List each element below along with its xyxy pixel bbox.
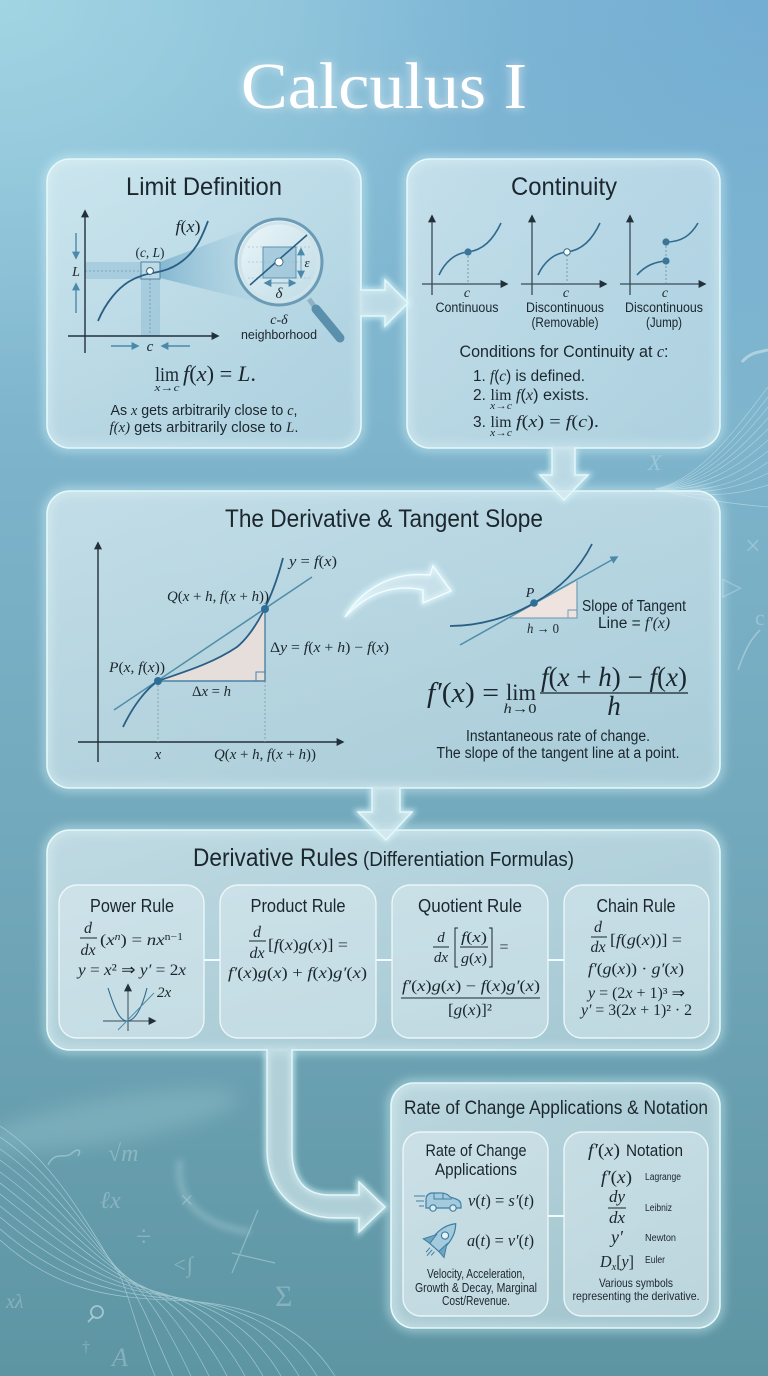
limit explanation (110, 402, 298, 436)
background: × (745, 531, 761, 562)
continuity conditions: x→c (489, 401, 513, 412)
arrow: limit to continuity (361, 280, 408, 326)
continuity conditions: x→c (489, 428, 513, 439)
panel: limit definition (47, 159, 361, 448)
card: notation: D (600, 1252, 612, 1271)
card: product rule: f′(x)g(x) + f(x)g′(x) (228, 965, 367, 982)
card: rate of change applications: Rate of Change (426, 1141, 526, 1160)
panel: derivative rules (47, 830, 720, 1050)
tangent graph: Slope of Tangent (582, 598, 687, 615)
graph: continuous: c (464, 286, 471, 301)
continuity conditions: f(x) exists. (516, 387, 589, 404)
card: product rule: [f(x)g(x)] = (268, 937, 348, 954)
continuity conditions: 3. (473, 414, 486, 431)
icon: magnifying glass: ε (304, 255, 310, 270)
card: notation: Lagrange (645, 1172, 681, 1183)
graph: continuous: Continuous (436, 300, 499, 315)
card: power rule: (x (100, 932, 113, 949)
continuity conditions: 2. (473, 387, 486, 404)
background: † (82, 1339, 90, 1356)
icon: car (414, 1193, 461, 1211)
derivative formula: h→0 (504, 702, 536, 717)
limit formula: lim (155, 364, 179, 386)
derivative explanation: Instantaneous rate of change. (466, 728, 650, 745)
limit graph: L (71, 265, 80, 280)
card: chain rule: Chain Rule (596, 895, 676, 916)
card: rate of change applications: Applications (435, 1160, 517, 1179)
card: notation: Euler (645, 1255, 666, 1266)
card: quotient rule: f(x) (461, 930, 487, 946)
card: notation: Various symbols (599, 1276, 673, 1290)
card: product rule (220, 885, 376, 1038)
card: notation: [ (616, 1252, 622, 1271)
limit formula: x→c (153, 382, 180, 394)
continuity conditions: f(x) = f(c). (516, 412, 599, 431)
card: rate of change applications: Growth & Decay, Marginal (415, 1281, 537, 1295)
continuity conditions: lim (490, 387, 512, 404)
card: power rule: y = x² ⇒ y′ = 2x (76, 962, 186, 979)
tangent graph (450, 544, 687, 645)
secant graph (78, 543, 389, 763)
icon: magnifying glass (236, 219, 340, 342)
background: ℓx (100, 1188, 121, 1214)
derivative formula: lim (506, 680, 536, 705)
card: power rule: nx (147, 932, 162, 949)
background: Σ (275, 1280, 292, 1313)
card: notation (564, 1132, 708, 1316)
card: chain rule: [f(g(x))] = (610, 932, 682, 949)
derivative formula: f(x + h) − f(x) (541, 662, 687, 692)
card: rate of change applications (403, 1132, 548, 1316)
card: product rule: Product Rule (250, 895, 346, 916)
card: notation: Newton (645, 1233, 676, 1244)
card: notation: dx (609, 1208, 625, 1227)
background: xλ (5, 1291, 24, 1313)
limit formula: f(x) = L. (183, 361, 256, 386)
background: A (110, 1343, 128, 1372)
derivative formula: h (607, 691, 621, 721)
arrow: derivative to rules (358, 788, 412, 840)
background: <∫ (172, 1252, 195, 1278)
tangent graph: P (525, 586, 535, 601)
tangent graph: Line = f′(x) (598, 615, 670, 632)
graph: jump discontinuity: c (662, 286, 669, 301)
arrow: continuity to derivative (540, 448, 588, 500)
graph: jump discontinuity (620, 216, 705, 330)
heading: (Differentiation Formulas) (363, 849, 574, 871)
card: quotient rule: d (437, 930, 445, 946)
background: c (755, 605, 765, 630)
card: chain rule: d (594, 919, 603, 936)
card: quotient rule: dx (434, 950, 448, 966)
card: notation: representing the derivative. (572, 1289, 700, 1303)
card: notation: f′(x) (588, 1140, 620, 1160)
continuity conditions: Conditions for Continuity at c: (460, 342, 668, 361)
limit graph: c (147, 339, 154, 355)
derivative formula (427, 662, 688, 721)
card: power rule: Power Rule (90, 895, 174, 916)
heading (193, 844, 574, 872)
card: notation: y′ (609, 1227, 624, 1247)
card: notation: dy (609, 1187, 625, 1206)
card: quotient rule: Quotient Rule (418, 895, 522, 916)
title: Calculus I (241, 50, 527, 123)
card: notation: y] (622, 1252, 634, 1271)
graph: removable discontinuity: Discontinuous (526, 300, 604, 315)
card: power rule: d (84, 920, 93, 937)
card: power rule: n (115, 932, 121, 943)
secant graph: Δx = h (192, 684, 231, 700)
card: quotient rule: = (499, 939, 509, 956)
card: chain rule (564, 885, 709, 1038)
graph: continuous (422, 216, 507, 315)
background: X (647, 450, 663, 475)
continuity conditions: lim (490, 414, 512, 431)
heading: The Derivative & Tangent Slope (225, 505, 543, 533)
card: product rule: dx (249, 945, 265, 962)
card: power rule (59, 885, 204, 1038)
card: chain rule: y = (2x + 1)³ ⇒ (586, 985, 685, 1002)
icon: parabola graph (103, 985, 172, 1031)
limit explanation: As x gets arbitrarily close to c, (110, 402, 298, 419)
card: chain rule: f′(g(x)) · g′(x) (588, 961, 684, 978)
icon: magnifying glass: δ (276, 286, 284, 302)
card: power rule: ) = (121, 932, 147, 949)
secant graph: Q(x + h, f(x + h)) (214, 747, 316, 763)
background: × (180, 1188, 194, 1214)
background: √m (108, 1141, 139, 1167)
derivative formula: f′(x) = (427, 678, 499, 709)
secant graph: P(x, f(x)) (108, 660, 165, 676)
card: product rule: d (253, 924, 262, 941)
card: chain rule: dx (590, 939, 606, 956)
panel: rate of change applications and notation (391, 1083, 720, 1328)
continuity conditions (460, 342, 668, 439)
secant graph: x (154, 747, 162, 763)
card: rate of change applications: Velocity, Acceleration, (427, 1267, 525, 1281)
card: power rule: n−1 (165, 932, 183, 943)
limit formula (153, 361, 256, 394)
background: ÷ (136, 1222, 151, 1253)
card: notation: Notation (626, 1141, 683, 1160)
background: ▷ (722, 572, 742, 601)
graph: jump discontinuity: Discontinuous (625, 300, 703, 315)
secant graph: y = f(x) (287, 554, 337, 570)
heading: Derivative Rules (193, 844, 358, 872)
arrow: rules to applications (267, 1050, 385, 1232)
card: rate of change applications: a(t) = v′(t) (467, 1231, 534, 1250)
continuity conditions: 1. f(c) is defined. (473, 368, 585, 385)
graph: removable discontinuity: (Removable) (532, 315, 598, 330)
card: power rule: dx (80, 942, 96, 959)
heading: Limit Definition (126, 173, 282, 201)
limit graph: f(x) (176, 217, 200, 236)
derivative explanation (436, 728, 680, 762)
derivative explanation: The slope of the tangent line at a point. (436, 745, 680, 762)
secant graph: Q(x + h, f(x + h)) (167, 589, 269, 605)
graph: removable discontinuity: c (563, 286, 570, 301)
limit explanation: f(x) gets arbitrarily close to L. (110, 419, 298, 436)
panel: derivative and tangent slope (47, 491, 720, 788)
card: notation: f′(x) (601, 1167, 632, 1187)
card: rate of change applications: v(t) = s′(t) (468, 1191, 534, 1210)
secant graph: Δy = f(x + h) − f(x) (270, 640, 389, 656)
heading: Rate of Change Applications & Notation (404, 1098, 708, 1119)
arrow: secant to tangent (345, 566, 451, 617)
icon: rocket (417, 1214, 466, 1265)
card: notation: x (611, 1261, 616, 1273)
icon: magnifying glass: neighborhood (241, 327, 317, 342)
card: rate of change applications: Cost/Revenue. (442, 1294, 510, 1308)
card: quotient rule: [g(x)]² (448, 1002, 492, 1019)
limit graph: (c, L) (136, 246, 165, 261)
graph: jump discontinuity: (Jump) (646, 315, 682, 330)
graph: removable discontinuity (521, 216, 606, 330)
panel: continuity (407, 159, 720, 448)
card: quotient rule: g(x) (461, 951, 487, 967)
heading: Continuity (511, 173, 617, 201)
card: notation: Leibniz (645, 1203, 672, 1214)
limit graph (68, 211, 257, 355)
card: quotient rule: f′(x)g(x) − f(x)g′(x) (402, 978, 540, 995)
card: quotient rule (392, 885, 548, 1038)
icon: parabola graph: 2x (157, 985, 172, 1001)
card: chain rule: y′ = 3(2x + 1)² · 2 (579, 1002, 692, 1019)
tangent graph: h → 0 (527, 622, 559, 637)
icon: magnifying glass: c-δ (270, 313, 288, 328)
